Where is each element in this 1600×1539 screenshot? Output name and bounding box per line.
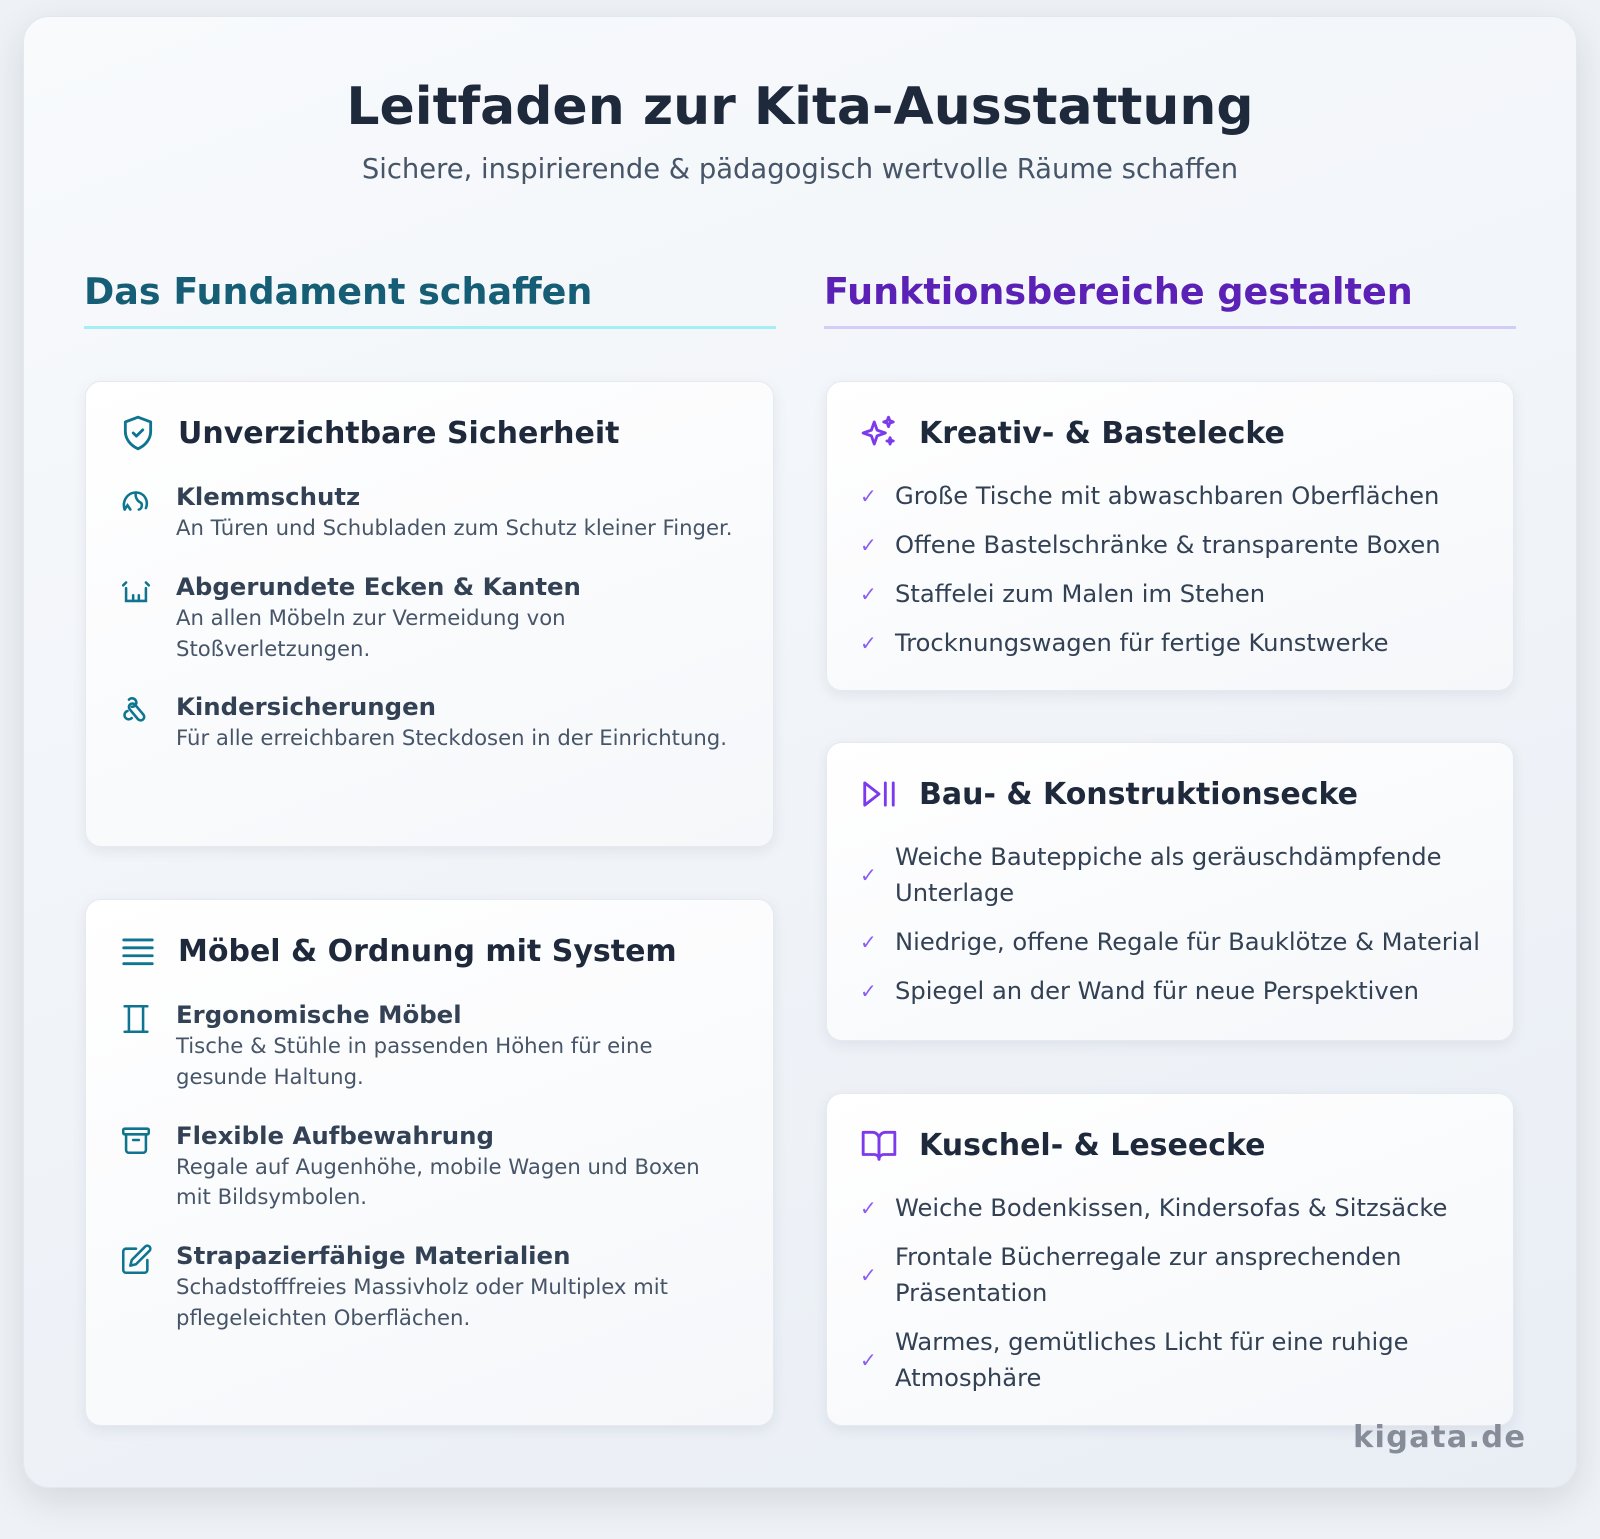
card heading: Bau- & Konstruktionsecke (919, 776, 1358, 812)
checklist: Weiche Bodenkissen, Kindersofas & Sitzsäcke (895, 1194, 1447, 1222)
checklist: Spiegel an der Wand für neue Perspektiven (895, 977, 1419, 1005)
checklist (860, 482, 1441, 657)
checklist: Niedrige, offene Regale für Bauklötze & Material (895, 928, 1480, 956)
checklist: Staffelei zum Malen im Stehen (895, 580, 1265, 608)
panel: Kuschel (826, 1093, 1514, 1426)
checklist: Präsentation (895, 1279, 1047, 1307)
panel: Kreativ (826, 381, 1514, 691)
item: Materialien (122, 1241, 668, 1330)
item: Materialien: pflegeleichten Oberflächen. (176, 1305, 470, 1330)
checklist: ✓ (860, 1348, 877, 1372)
checklist: ✓ (860, 863, 877, 887)
card heading: Kreativ- & Bastelecke (919, 416, 1285, 450)
item: Aufbewahrung: Flexible Aufbewahrung (176, 1121, 494, 1150)
panel: Möbel (85, 899, 774, 1426)
checklist: ✓ (860, 484, 877, 508)
item: Ergonomische Möbel: gesunde Haltung. (176, 1064, 364, 1089)
item: Aufbewahrung: Regale auf Augenhöhe, mobile Wagen und Boxen (176, 1154, 700, 1179)
checklist: ✓ (860, 533, 877, 557)
watermark: kigata.de (1353, 1420, 1526, 1455)
checklist: Unterlage (895, 879, 1014, 907)
item: Ecken (122, 572, 581, 661)
item: Materialien: Strapazierfähige Materialien (176, 1241, 570, 1270)
item: Aufbewahrung: mit Bildsymbolen. (176, 1184, 367, 1209)
checklist (860, 1194, 1447, 1392)
checklist: ✓ (860, 1196, 877, 1220)
checklist: Warmes, gemütliches Licht für eine ruhige (895, 1328, 1409, 1356)
checklist: ✓ (860, 979, 877, 1003)
checklist: Offene Bastelschränke & transparente Boxen (895, 531, 1441, 559)
item: Kindersicherungen: Für alle erreichbaren Steckdosen in der Einrichtung. (176, 725, 727, 750)
checklist (860, 843, 1480, 1005)
card heading: Unverzichtbare Sicherheit (178, 416, 619, 450)
checklist: Frontale Bücherregale zur ansprechenden (895, 1243, 1401, 1271)
item: Kindersicherungen: Kindersicherungen (176, 692, 436, 721)
checklist: ✓ (860, 582, 877, 606)
checklist: ✓ (860, 631, 877, 655)
subtitle: Sichere, inspirierende & pädagogisch wertvolle Räume schaffen (362, 154, 1238, 185)
item: Aufbewahrung (122, 1121, 700, 1209)
panel: Bau (826, 742, 1514, 1041)
card heading: Kuschel- & Leseecke (919, 1128, 1266, 1162)
item: Materialien: Schadstofffreies Massivholz oder Multiplex mit (176, 1274, 668, 1299)
checklist: ✓ (860, 1263, 877, 1287)
checklist: Weiche Bauteppiche als geräuschdämpfende (895, 843, 1441, 871)
title: Leitfaden zur Kita-Ausstattung (346, 77, 1254, 137)
item: Klemmschutz (122, 482, 732, 540)
item: Klemmschutz: Klemmschutz (176, 482, 360, 511)
item: Ecken: An allen Möbeln zur Vermeidung von (176, 605, 566, 630)
checklist: Atmosphäre (895, 1364, 1041, 1392)
item: Ecken: Stoßverletzungen. (176, 636, 370, 661)
heading: right section: Funktionsbereiche gestalten (824, 270, 1413, 313)
item: Klemmschutz: An Türen und Schubladen zum Schutz kleiner Finger. (176, 515, 732, 540)
panel: Sicherheit (85, 381, 774, 847)
checklist: ✓ (860, 930, 877, 954)
card heading: Möbel & Ordnung mit System (178, 934, 677, 968)
item: Ecken: Abgerundete Ecken & Kanten (176, 572, 581, 601)
item: Ergonomische Möbel: Ergonomische Möbel (176, 1000, 462, 1029)
item: Ergonomische Möbel (123, 1000, 653, 1089)
checklist: Trocknungswagen für fertige Kunstwerke (895, 629, 1389, 657)
heading: left section: Das Fundament schaffen (84, 270, 592, 313)
item: Ergonomische Möbel: Tische & Stühle in passenden Höhen für eine (176, 1033, 653, 1058)
item: Kindersicherungen (123, 692, 727, 750)
checklist: Große Tische mit abwaschbaren Oberflächen (895, 482, 1439, 510)
